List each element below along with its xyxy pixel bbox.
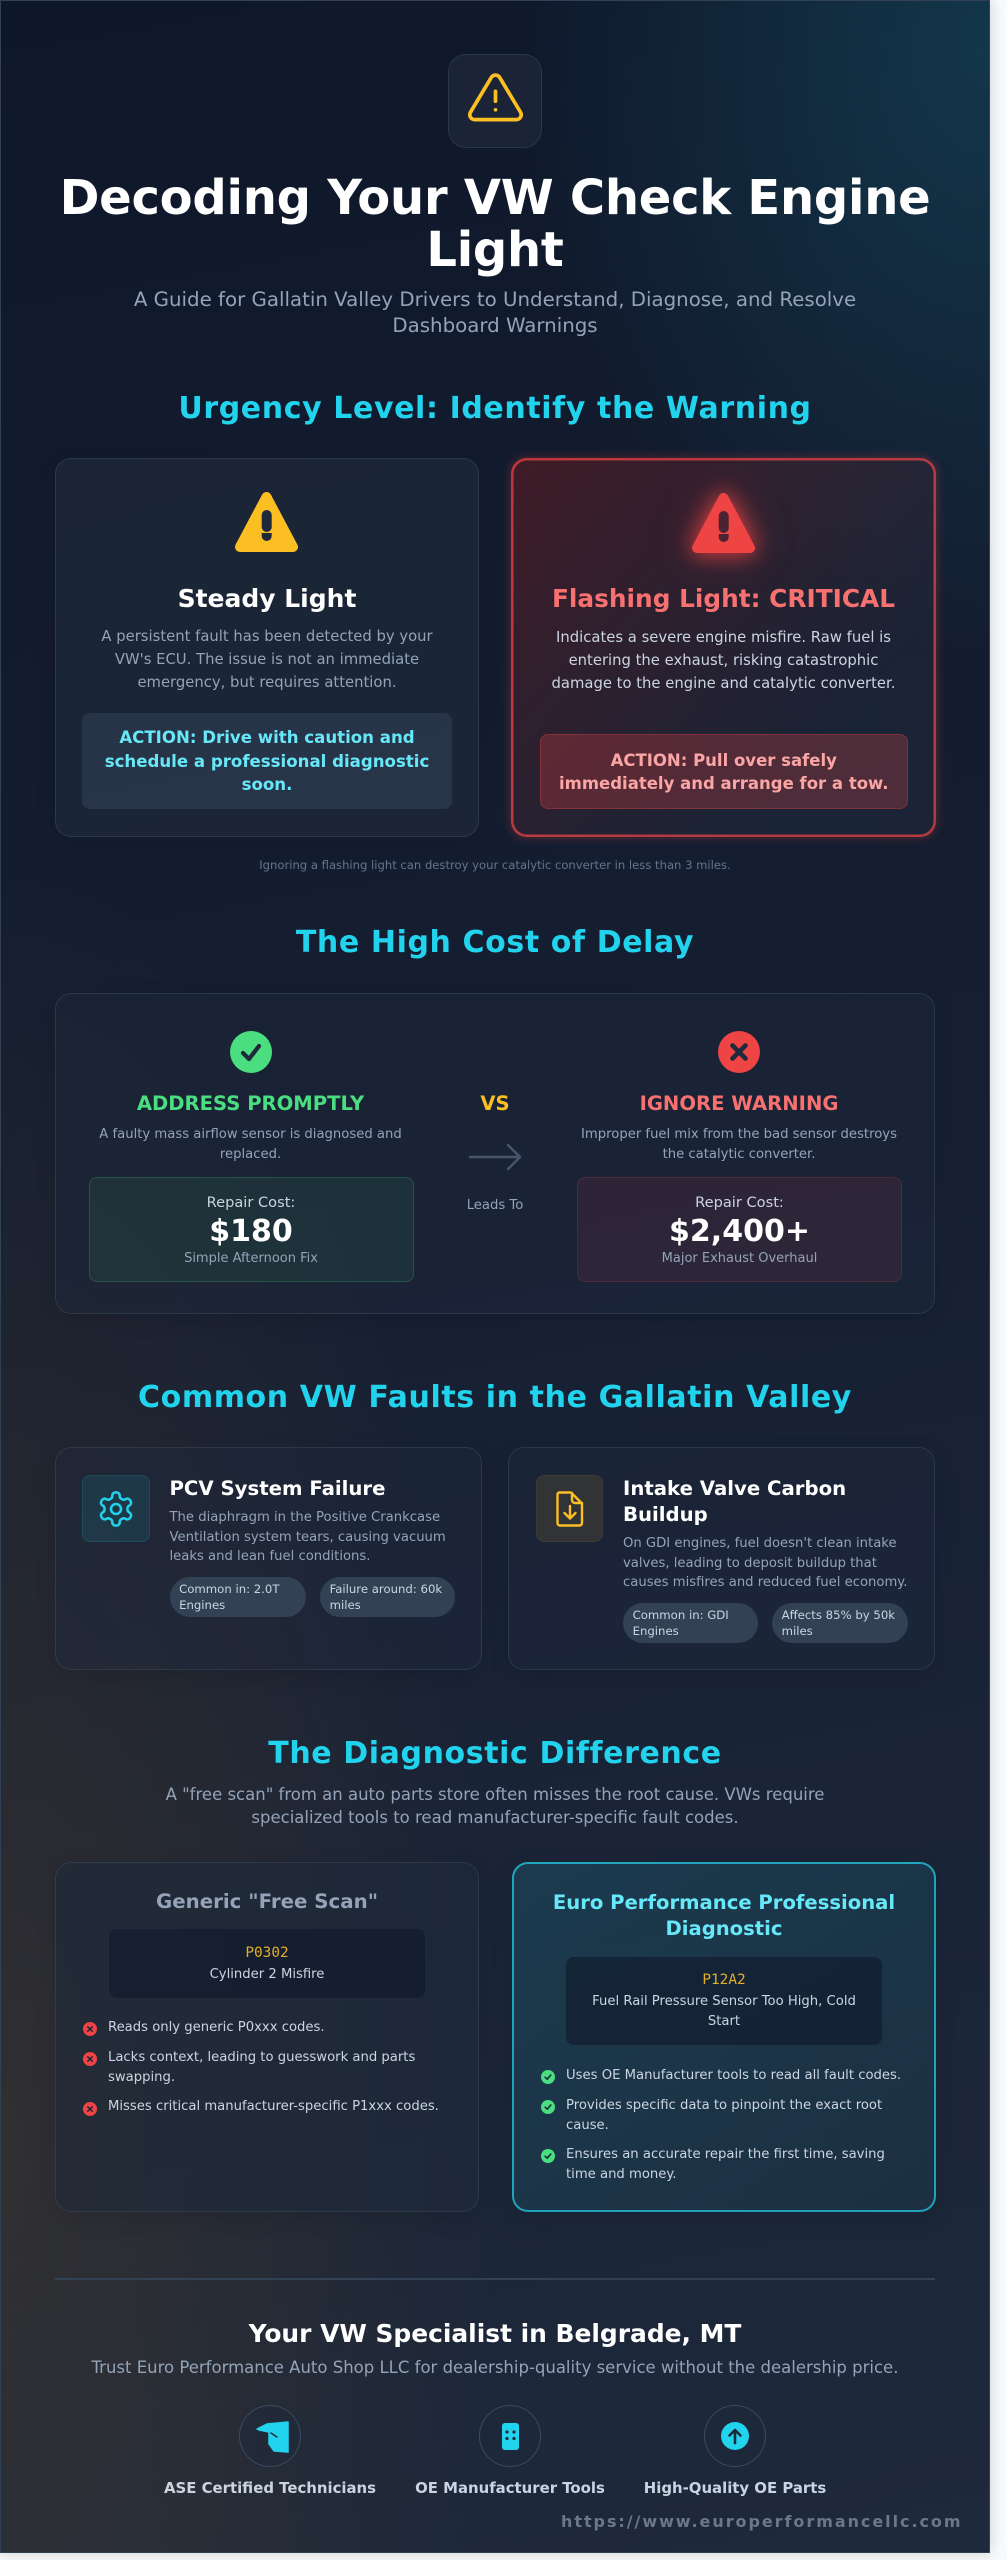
code readout: P0302: P0302: [245, 1945, 289, 1961]
list: professional benefits: Provides specific data to pinpoint the exact root: [566, 2098, 882, 2112]
text: carbon description: [623, 1536, 907, 1590]
panel: steady light: [55, 458, 479, 837]
label: repair cost: Repair Cost:: [695, 1194, 784, 1211]
label: ASE certified: ASE Certified Technicians: [164, 2478, 376, 2496]
heading: steady light: Steady Light: [178, 584, 356, 613]
callout: steady action: schedule a professional diagnostic: [105, 752, 429, 770]
callout: steady action: ACTION: Drive with caution and: [119, 728, 415, 747]
code readout: P0302: Cylinder 2 Misfire: [210, 1967, 324, 1982]
code readout: P12A2: P12A2: [702, 1972, 746, 1988]
callout: steady action: soon.: [242, 775, 292, 794]
code readout: P0302: [109, 1929, 425, 1998]
label: major overhaul: Major Exhaust Overhaul: [662, 1251, 817, 1266]
icon: green check: [230, 1031, 272, 1073]
list: generic limitations: [83, 2020, 439, 2116]
text: PCV description: leaks and lean fuel conditions.: [170, 1549, 370, 1564]
panel: professional diagnostic: [512, 1862, 936, 2212]
heading: PCV system failure: PCV System Failure: [170, 1476, 386, 1500]
text: diagnostic intro: [166, 1784, 824, 1827]
panel: generic free scan: [55, 1862, 479, 2212]
callout: steady action: [82, 713, 452, 809]
panel: high repair cost: [577, 1177, 902, 1282]
icon: red cross: [718, 1031, 760, 1073]
text: diagnostic intro: A "free scan" from an auto parts store often misses the root cause. VWs require: [166, 1784, 824, 1804]
subtitle: [134, 288, 856, 336]
icon: header warning badge: [448, 54, 542, 148]
number: $180: $180: [209, 1214, 293, 1249]
label: OE parts: High-Quality OE Parts: [644, 2478, 826, 2496]
title: [60, 170, 930, 278]
text: ignore description: [581, 1126, 897, 1162]
icon: OE parts: [704, 2405, 766, 2467]
text: carbon description: On GDI engines, fuel doesn't clean intake: [623, 1536, 897, 1551]
text: flashing description: damage to the engine and catalytic converter.: [552, 674, 895, 692]
text: flashing description: Indicates a severe engine misfire. Raw fuel is: [556, 628, 891, 646]
tag: engines: Common in: GDI: [633, 1608, 729, 1622]
heading: common faults: Common VW Faults in the Gallatin Valley: [138, 1380, 852, 1415]
heading: intake valve carbon buildup: Intake Valve Carbon: [623, 1476, 846, 1500]
label: leads to: Leads To: [467, 1198, 523, 1213]
text: address description: A faulty mass airflow sensor is diagnosed and: [99, 1126, 402, 1142]
text: diagnostic intro: specialized tools to read manufacturer-specific fault codes.: [251, 1808, 739, 1827]
panel: cost comparison: [55, 993, 935, 1314]
tag: engines: Common in: 2.0T: [179, 1582, 279, 1596]
text: address description: [99, 1126, 402, 1162]
heading: intake valve carbon buildup: [623, 1476, 846, 1526]
icon: ASE certified: [239, 2405, 301, 2467]
tag: mileage: miles: [330, 1598, 361, 1612]
text: PCV description: Ventilation system tears, causing vacuum: [170, 1530, 446, 1545]
subtitle: A Guide for Gallatin Valley Drivers to Understand, Diagnose, and Resolve: [134, 288, 856, 310]
panel: low repair cost: [88, 1177, 414, 1282]
label: versus: VS: [480, 1092, 510, 1115]
code readout: P12A2: Fuel Rail Pressure Sensor Too High, Cold: [592, 1994, 856, 2009]
label: simple fix: Simple Afternoon Fix: [184, 1251, 318, 1266]
list: professional benefits: time and money.: [566, 2166, 676, 2182]
heading: address promptly: ADDRESS PROMPTLY: [137, 1092, 364, 1115]
heading: specialist: Your VW Specialist in Belgrade, MT: [249, 2319, 741, 2348]
text: flashing description: entering the exhaust, risking catastrophic: [569, 652, 878, 668]
code readout: P12A2: [566, 1957, 882, 2045]
list: generic limitations: swapping.: [108, 2070, 175, 2085]
tag: mileage: [320, 1577, 455, 1617]
list: professional benefits: cause.: [566, 2118, 609, 2132]
tag: engines: [170, 1577, 306, 1617]
text: steady description: emergency, but requires attention.: [137, 674, 397, 690]
heading: euro performance diagnostic: [553, 1891, 895, 1940]
list: professional benefits: Uses OE Manufacturer tools to read all fault codes.: [566, 2068, 901, 2082]
number: $2,400+: $2,400+: [669, 1214, 810, 1249]
heading: urgency level: Urgency Level: Identify the Warning: [178, 391, 812, 426]
text: steady description: A persistent fault has been detected by your: [101, 628, 433, 644]
arrow: leads to: [468, 1144, 522, 1170]
callout: flashing action: immediately and arrange for a tow.: [559, 774, 888, 792]
list: professional benefits: Ensures an accurate repair the first time, saving: [566, 2146, 885, 2162]
callout: flashing action: [540, 734, 908, 809]
heading: intake valve carbon buildup: Buildup: [623, 1502, 708, 1526]
icon: document with arrow: [536, 1475, 603, 1542]
text: specialist tagline: Trust Euro Performance Auto Shop LLC for dealership-quality service without the dealership price.: [92, 2358, 898, 2377]
heading: flashing light: Flashing Light: CRITICAL: [552, 584, 895, 613]
heading: cost of delay: The High Cost of Delay: [296, 925, 694, 960]
text: ignore description: the catalytic converter.: [663, 1146, 815, 1162]
list: generic limitations: Misses critical manufacturer-specific P1xxx codes.: [108, 2099, 439, 2114]
tag: engines: Engines: [633, 1624, 679, 1638]
label: repair cost: Repair Cost:: [207, 1194, 295, 1211]
text: PCV description: [169, 1510, 446, 1564]
text: steady description: VW's ECU. The issue is not an immediate: [115, 650, 419, 668]
heading: euro performance diagnostic: Euro Performance Professional: [553, 1891, 895, 1914]
tag: engines: [623, 1603, 758, 1643]
code readout: P12A2: Start: [708, 2014, 740, 2029]
list: generic limitations: Reads only generic P0xxx codes.: [108, 2020, 325, 2035]
tag: prevalence: [772, 1603, 908, 1643]
panel: flashing light: [511, 458, 936, 837]
heading: euro performance diagnostic: Diagnostic: [666, 1917, 782, 1940]
text: flashing description: [552, 628, 895, 692]
note: catalytic converter warning: Ignoring a flashing light can destroy your catalytic converter in less than 3 miles.: [259, 858, 731, 872]
label: manufacturer tools: OE Manufacturer Tools: [415, 2478, 605, 2496]
heading: generic free scan: Generic "Free Scan": [156, 1890, 378, 1913]
list: generic limitations: Lacks context, leading to guesswork and parts: [108, 2050, 415, 2065]
icon: red warning triangle: [676, 478, 772, 576]
text: carbon description: causes misfires and reduced fuel economy.: [623, 1575, 907, 1590]
panel: PCV failure: [55, 1447, 482, 1670]
subtitle: Dashboard Warnings: [392, 314, 598, 336]
text: address description: replaced.: [220, 1146, 281, 1162]
title: Decoding Your VW Check Engine: [60, 170, 930, 226]
footer: website url: https://www.europerformancellc.com: [561, 2512, 962, 2531]
icon: amber warning triangle: [235, 492, 298, 552]
text: PCV description: The diaphragm in the Positive Crankcase: [170, 1510, 440, 1525]
list: professional benefits: [541, 2068, 901, 2182]
tag: mileage: Failure around: 60k: [330, 1582, 442, 1596]
text: steady description: [101, 628, 433, 690]
text: carbon description: valves, leading to deposit buildup that: [623, 1556, 877, 1571]
heading: ignore warning: IGNORE WARNING: [640, 1092, 838, 1115]
heading: diagnostic difference: The Diagnostic Difference: [268, 1736, 722, 1771]
panel: carbon buildup: [508, 1447, 935, 1670]
icon: gear: [82, 1475, 150, 1542]
icon: manufacturer tools: [479, 2405, 541, 2467]
text: ignore description: Improper fuel mix from the bad sensor destroys: [581, 1126, 897, 1142]
tag: prevalence: miles: [782, 1624, 813, 1638]
title: Light: [426, 222, 564, 278]
tag: prevalence: Affects 85% by 50k: [782, 1608, 895, 1622]
tag: engines: Engines: [179, 1598, 225, 1612]
callout: flashing action: ACTION: Pull over safely: [611, 750, 837, 770]
